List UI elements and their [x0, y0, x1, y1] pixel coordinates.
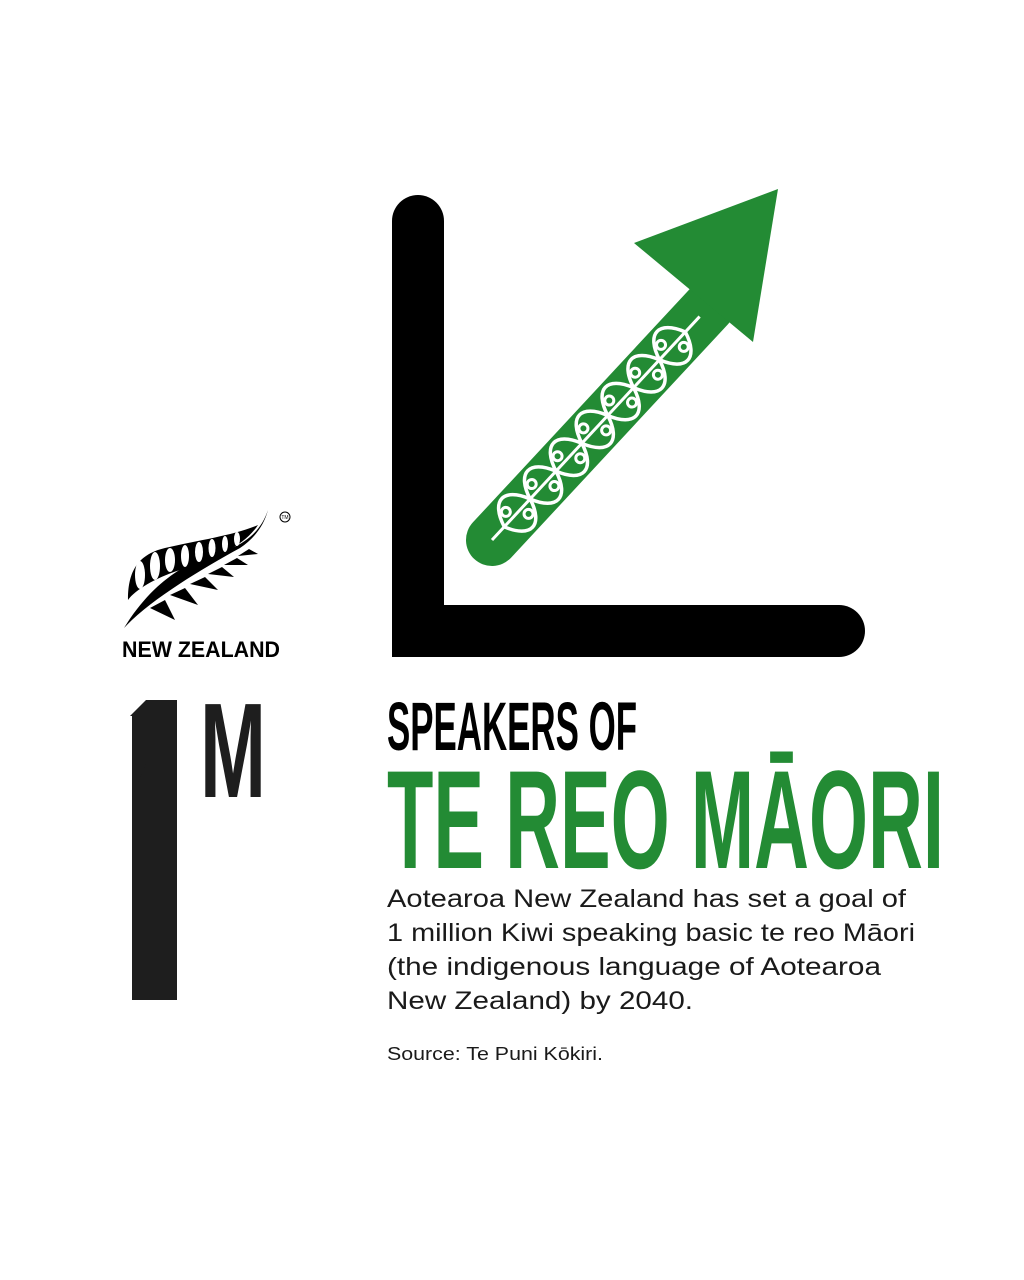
body text: (the indigenous language of Aotearoa [387, 953, 881, 981]
chart axes [392, 195, 865, 657]
koru pattern [477, 302, 715, 554]
big number 1M: 1 [122, 621, 182, 1089]
logo: New Zealand fern [122, 510, 290, 662]
body text: Aotearoa New Zealand has set a goal of [387, 885, 906, 913]
big number 1M [130, 700, 261, 1000]
heading: speakers of: SPEAKERS OF [387, 688, 637, 765]
body text: 1 million Kiwi speaking basic te reo Māori [387, 919, 915, 947]
trademark [280, 512, 290, 522]
source: Source: Te Puni Kōkiri. [387, 1044, 603, 1064]
growth arrow [455, 189, 778, 577]
trademark: TM [281, 515, 289, 521]
body text [387, 885, 915, 1015]
logo text: NEW ZEALAND [122, 637, 280, 662]
body text: New Zealand) by 2040. [387, 987, 693, 1015]
big number 1M: M [200, 675, 266, 826]
